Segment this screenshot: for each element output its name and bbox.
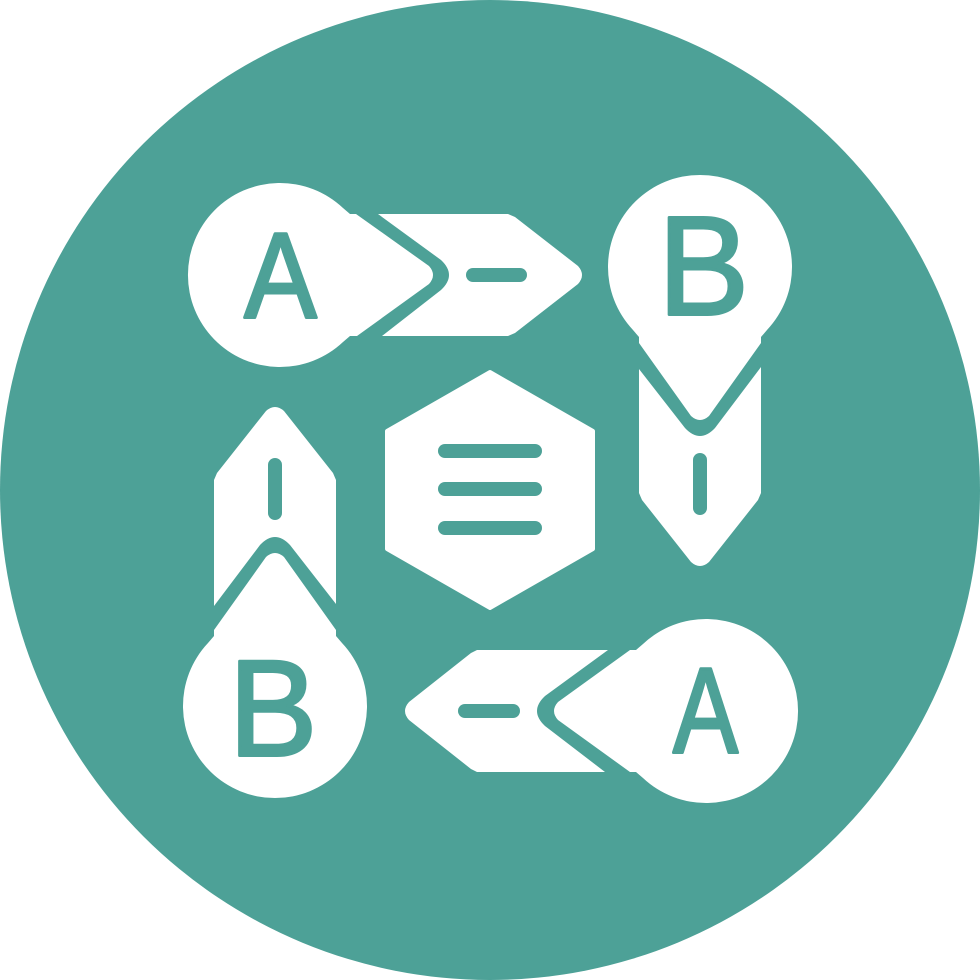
center hexagon menu (387, 372, 593, 608)
bottom-left pin B and arrow (183, 407, 367, 798)
letter B: B (658, 188, 749, 345)
top-right pin B and arrow (608, 175, 792, 566)
pin A shape (554, 619, 798, 803)
arrow down (639, 367, 761, 566)
arrow right (378, 214, 582, 336)
arrow up (214, 407, 336, 606)
menu line 2 (438, 482, 542, 496)
top-left pin A and arrow (188, 183, 582, 367)
dash (466, 268, 527, 282)
dash (458, 704, 520, 718)
letter A: A (673, 643, 738, 779)
pin A shape (188, 183, 433, 367)
arrow left (405, 650, 608, 772)
menu line 1 (438, 444, 542, 458)
pin B shape (183, 553, 367, 798)
menu line 3 (438, 521, 542, 535)
dash (268, 458, 282, 520)
letter B: B (229, 632, 317, 785)
bottom-right pin A and arrow (405, 619, 798, 803)
hexagon (387, 372, 593, 608)
pin B shape (608, 175, 792, 420)
dash (693, 453, 707, 515)
letter A: A (244, 208, 317, 344)
